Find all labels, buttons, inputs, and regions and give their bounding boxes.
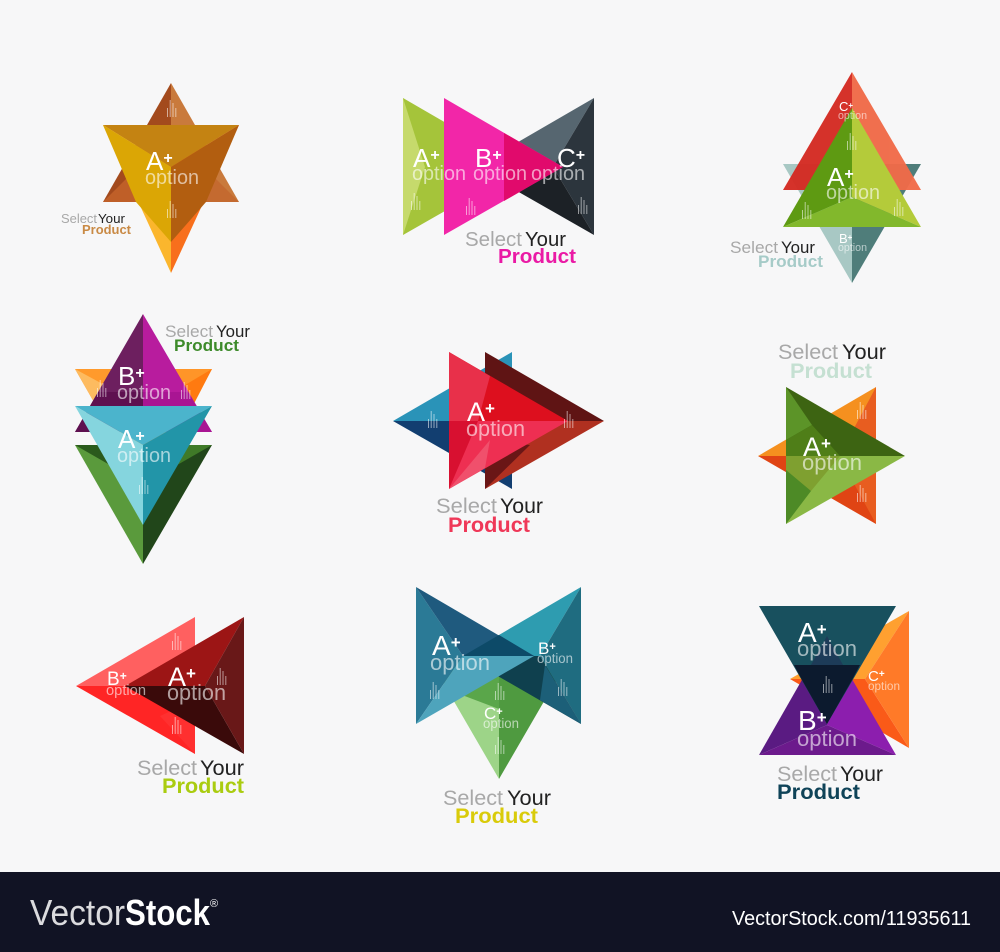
caption: Your xyxy=(98,211,126,226)
purple triangle xyxy=(759,636,896,755)
green triangle xyxy=(783,108,921,227)
caption: Select xyxy=(436,495,497,518)
orange triangle xyxy=(758,387,876,524)
labels: C xyxy=(868,668,879,685)
red triangle xyxy=(76,617,195,754)
labels: option xyxy=(117,382,171,404)
footer logo: ® xyxy=(210,898,218,910)
icon: bars xyxy=(824,676,832,693)
labels: + xyxy=(135,365,145,382)
overlap xyxy=(794,636,860,724)
labels: + xyxy=(135,428,145,445)
labels: + xyxy=(879,669,885,680)
labels: option xyxy=(537,651,573,666)
caption: Product xyxy=(448,514,530,537)
panel: teal bow with green xyxy=(416,587,581,828)
panel: red blue arrows xyxy=(393,352,604,537)
labels xyxy=(412,143,585,185)
labels: C xyxy=(557,143,576,173)
labels: + xyxy=(576,147,585,164)
labels: + xyxy=(120,669,127,683)
caption: Select xyxy=(165,322,213,341)
up triangle xyxy=(103,83,239,202)
labels: + xyxy=(451,633,461,652)
labels: B xyxy=(475,143,492,173)
caption: Select xyxy=(778,341,838,364)
labels: C xyxy=(484,704,496,723)
label A+: + xyxy=(163,150,173,167)
labels: + xyxy=(186,664,196,683)
icon: bars xyxy=(802,133,903,219)
caption: Product xyxy=(777,781,860,804)
caption xyxy=(443,787,551,828)
labels: A xyxy=(803,432,821,462)
caption: Your xyxy=(842,341,886,364)
labels: A xyxy=(413,143,430,173)
caption xyxy=(778,341,886,383)
footer logo: Stock xyxy=(125,892,211,933)
left teal triangle xyxy=(416,587,534,724)
red triangle xyxy=(449,352,568,489)
dark red triangle xyxy=(485,352,604,489)
labels: + xyxy=(549,641,556,653)
labels: option xyxy=(826,182,880,204)
caption: Select xyxy=(465,229,522,251)
labels: option xyxy=(838,242,867,254)
caption xyxy=(165,322,250,355)
labels: + xyxy=(817,708,827,727)
icon: bars xyxy=(98,380,190,494)
caption: Select xyxy=(61,211,97,226)
footer bar xyxy=(0,872,1000,952)
panel: teal purple hourglass xyxy=(759,606,909,804)
panel: purple teal green stack xyxy=(75,314,250,564)
red triangle xyxy=(783,72,921,190)
labels: + xyxy=(821,434,831,453)
labels: A xyxy=(118,424,135,454)
labels: A xyxy=(827,162,844,192)
labels: option xyxy=(473,163,527,185)
caption: Your xyxy=(525,229,566,251)
caption: Select xyxy=(443,787,503,810)
caption xyxy=(777,763,883,804)
labels: + xyxy=(848,101,853,110)
labels xyxy=(466,397,525,441)
teal triangle xyxy=(783,164,921,283)
caption: Product xyxy=(758,252,823,271)
green triangle xyxy=(75,445,212,564)
labels: + xyxy=(430,147,440,164)
labels: B xyxy=(107,669,120,690)
panel: orange star badge xyxy=(61,83,239,273)
labels: option xyxy=(797,636,857,661)
caption: Your xyxy=(840,763,883,786)
caption: Select xyxy=(137,757,197,780)
panel: red left arrows xyxy=(76,617,244,798)
dark triangle xyxy=(475,98,594,235)
labels xyxy=(106,662,226,705)
labels: option xyxy=(838,110,867,122)
labels: A xyxy=(467,397,485,427)
labels: A xyxy=(168,662,186,692)
labels: option xyxy=(117,445,171,467)
icon: bars xyxy=(168,100,176,218)
labels: A xyxy=(798,617,817,648)
labels: C xyxy=(839,99,848,114)
labels: option xyxy=(466,416,525,441)
labels: + xyxy=(848,233,853,242)
label A+: A xyxy=(146,146,163,176)
caption xyxy=(730,238,823,271)
footer logo: Vector xyxy=(30,892,125,933)
labels xyxy=(802,432,862,475)
blue triangle xyxy=(393,352,512,489)
down triangle xyxy=(103,125,239,273)
right teal triangle xyxy=(463,587,581,724)
orange triangle xyxy=(790,611,909,748)
labels: option xyxy=(868,679,900,693)
icon: bars xyxy=(428,411,573,428)
labels: option xyxy=(483,716,519,731)
icon: bars xyxy=(172,633,226,734)
panel: green orange star xyxy=(758,341,905,524)
icon: bars xyxy=(430,679,567,754)
caption: Your xyxy=(500,495,543,518)
labels xyxy=(797,617,900,751)
labels: option xyxy=(106,682,146,699)
panel: red green teal stack xyxy=(730,72,921,283)
caption: Product xyxy=(82,222,132,237)
caption: Your xyxy=(216,322,250,341)
caption xyxy=(137,757,244,798)
labels: B xyxy=(798,705,817,736)
caption: Your xyxy=(507,787,551,810)
labels: B xyxy=(538,639,549,658)
green triangle xyxy=(403,98,522,235)
labels: + xyxy=(496,706,503,718)
labels: option xyxy=(430,650,490,675)
caption: Product xyxy=(174,336,239,355)
labels: option xyxy=(412,163,466,185)
footer url: VectorStock.com/11935611 xyxy=(732,908,971,930)
caption: Product xyxy=(790,360,872,383)
labels: B xyxy=(118,361,135,391)
caption xyxy=(436,495,543,537)
panel: green magenta dark arrows xyxy=(403,98,594,268)
green triangle xyxy=(430,660,568,779)
labels xyxy=(430,630,573,731)
footer logo xyxy=(30,892,218,933)
labels: option xyxy=(802,450,862,475)
green triangle xyxy=(786,387,905,524)
caption: Product xyxy=(162,775,244,798)
labels: + xyxy=(492,147,502,164)
icon: bars xyxy=(858,402,866,502)
caption: Product xyxy=(498,246,576,268)
labels: + xyxy=(844,166,854,183)
labels xyxy=(826,99,880,254)
caption xyxy=(61,211,132,237)
caption: Select xyxy=(730,238,778,257)
labels: option xyxy=(531,163,585,185)
purple triangle xyxy=(75,314,212,432)
labels: option xyxy=(167,680,226,705)
labels: + xyxy=(485,399,495,418)
caption xyxy=(465,229,576,268)
icon: bars xyxy=(412,193,587,215)
labels: A xyxy=(432,630,451,661)
dark red triangle xyxy=(125,617,244,754)
labels: option xyxy=(797,726,857,751)
caption: Select xyxy=(777,763,837,786)
labels: B xyxy=(839,231,848,246)
caption: Product xyxy=(455,805,538,828)
magenta triangle xyxy=(444,98,563,235)
caption: Your xyxy=(200,757,244,780)
labels xyxy=(117,361,171,467)
teal triangle xyxy=(75,406,212,525)
teal triangle xyxy=(759,606,896,724)
orange triangle xyxy=(75,369,212,488)
caption: Your xyxy=(781,238,815,257)
labels: + xyxy=(817,620,827,639)
option text: option xyxy=(145,167,199,189)
